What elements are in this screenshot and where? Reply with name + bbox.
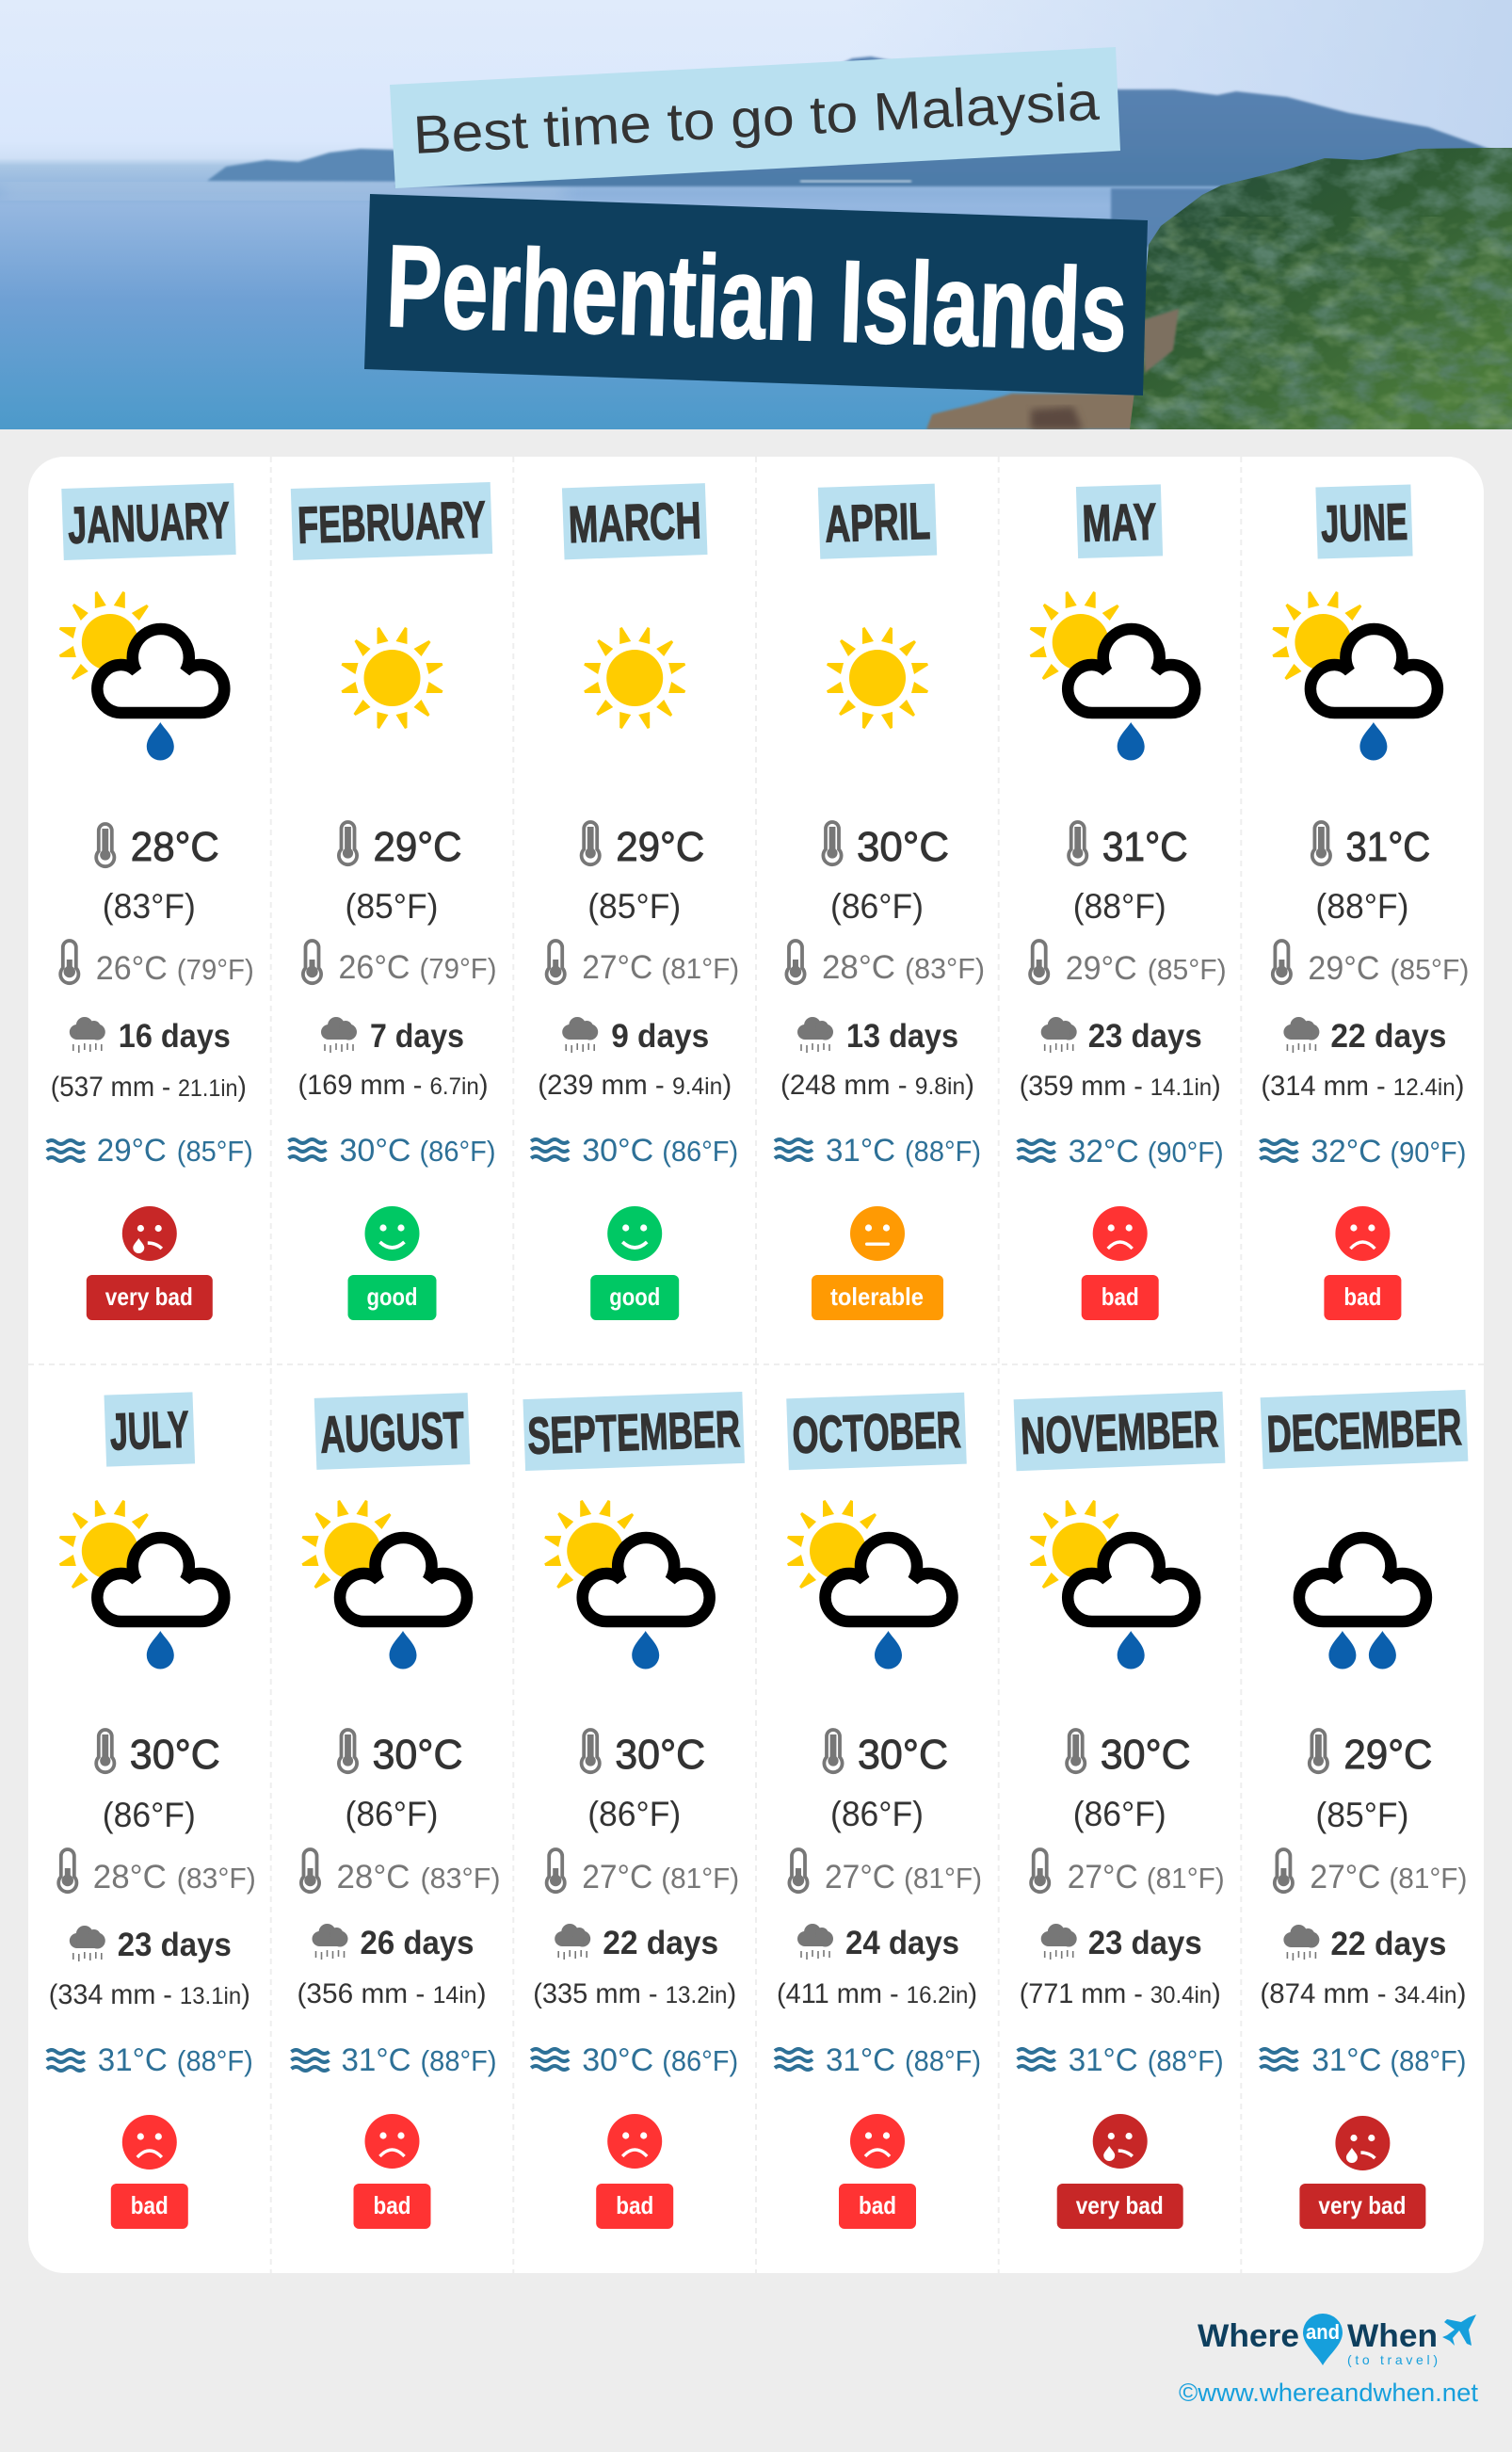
rating badge: bad: bad [373, 2191, 410, 2219]
high temperature fahrenheit: (86°F) [103, 1796, 196, 1834]
month label [1315, 485, 1413, 558]
sea temperature: 30°C [582, 1133, 653, 1169]
icon: waves [775, 2049, 812, 2070]
icon: rain cloud [1283, 1017, 1319, 1053]
low temperature: 27°C [582, 949, 652, 986]
panel: March [531, 483, 739, 1320]
icon: sun, cloud and rain [301, 1500, 467, 1669]
logo: Where and When: (to travel) [1347, 2352, 1438, 2367]
high temperature fahrenheit: (85°F) [1315, 1796, 1408, 1834]
sea temperature: (85°F) [177, 1135, 253, 1168]
rating badge: bad: bad [616, 2191, 653, 2219]
rating badge: good [348, 1275, 437, 1320]
sea temperature: 31°C [1311, 2042, 1381, 2078]
low temperature [1310, 1859, 1467, 1895]
rainfall: (248 mm - 9.8in) [780, 1070, 974, 1101]
rating badge: bad: bad [1102, 1282, 1139, 1311]
title ribbon [364, 194, 1148, 395]
rainfall: (239 mm - 9.4in) [538, 1070, 732, 1101]
logo: Where and When: and [1306, 2320, 1340, 2344]
icon: sun, cloud and rain [1030, 591, 1195, 761]
rainfall: (169 mm - 6.7in) [298, 1070, 489, 1101]
month label [562, 483, 707, 559]
low temperature: (83°F) [420, 1862, 501, 1895]
month label [818, 484, 937, 559]
panel: April [775, 484, 985, 1320]
low temperature: (79°F) [420, 952, 497, 985]
icon: waves [1018, 2049, 1055, 2070]
icon: thermometer high [1069, 822, 1086, 864]
logo: Where and When: Where [1198, 2318, 1299, 2354]
high temperature fahrenheit: (83°F) [103, 887, 196, 926]
subtitle ribbon: Best time to go to Malaysia [411, 72, 1101, 166]
month label [786, 1393, 967, 1470]
logo: Where and When: When [1347, 2318, 1438, 2354]
month label [61, 483, 236, 560]
month label: OCTOBER [792, 1400, 962, 1464]
sea temperature: 31°C [1069, 2042, 1138, 2078]
low temperature: (81°F) [661, 952, 739, 985]
month label: AUGUST [319, 1400, 465, 1464]
high temperature celsius: 31°C [1345, 824, 1430, 870]
icon: thermometer high [1067, 1730, 1085, 1772]
sea temperature: (88°F) [905, 1135, 981, 1168]
month label [1076, 484, 1163, 558]
panel: January [47, 483, 254, 1320]
high temperature fahrenheit: (85°F) [587, 887, 681, 926]
high temperature celsius: 29°C [616, 824, 704, 870]
icon: thermometer high [339, 1730, 357, 1772]
rating badge: very bad: very bad [1076, 2191, 1164, 2219]
icon: thermometer low [789, 1849, 808, 1892]
rainfall: (335 mm - 13.2in) [533, 1978, 736, 2009]
low temperature [1066, 950, 1227, 987]
rating badge: bad: bad [1343, 1282, 1381, 1311]
month label [1014, 1392, 1225, 1471]
high temperature fahrenheit: (88°F) [1073, 887, 1166, 926]
month label: APRIL [824, 492, 931, 554]
logo: Where and When [1198, 2314, 1476, 2367]
icon: thermometer low [547, 1849, 565, 1892]
rainy days: 22 days [1330, 1926, 1446, 1962]
icon: sun [584, 627, 685, 729]
sea temperature: (88°F) [177, 2044, 253, 2077]
icon: smiling face [365, 1206, 420, 1261]
high temperature fahrenheit: (86°F) [587, 1795, 681, 1833]
low temperature: 27°C [582, 1859, 652, 1895]
sea temperature [826, 1133, 981, 1169]
month label: JUNE [1320, 492, 1408, 553]
low temperature: (81°F) [1147, 1862, 1225, 1895]
sea temperature: 31°C [341, 2042, 410, 2078]
icon: rain cloud [70, 1017, 105, 1053]
header photo: sea and islands [0, 0, 1512, 429]
month label: SEPTEMBER [526, 1399, 741, 1465]
icon: sun, cloud and rain [1030, 1500, 1195, 1669]
low temperature [337, 1859, 501, 1895]
panel: June [1260, 485, 1469, 1320]
high temperature celsius: 30°C [1101, 1732, 1191, 1778]
icon: waves [775, 1139, 812, 1160]
low temperature: 27°C [1068, 1859, 1138, 1895]
icon: thermometer high [96, 1730, 114, 1772]
rainfall: (356 mm - 14in) [298, 1978, 486, 2009]
low temperature: 28°C [93, 1859, 167, 1895]
icon: waves [1260, 1140, 1297, 1161]
low temperature: (81°F) [1389, 1862, 1467, 1895]
rainfall: (411 mm - 16.2in) [777, 1978, 977, 2009]
icon: thermometer low [547, 941, 565, 983]
rating badge: very bad [87, 1275, 213, 1320]
rating badge: very bad [1057, 2184, 1183, 2229]
rating badge: very bad: very bad [105, 1282, 193, 1311]
icon: thermometer high [339, 822, 357, 864]
high temperature celsius: 30°C [858, 1732, 948, 1778]
low temperature: (83°F) [177, 1862, 256, 1895]
sea temperature: (88°F) [1390, 2044, 1466, 2077]
icon: waves [292, 2050, 330, 2071]
icon: thermometer low [1275, 1849, 1293, 1892]
high temperature fahrenheit: (86°F) [345, 1795, 439, 1833]
panel: August [292, 1393, 501, 2229]
month label: MAY [1082, 492, 1157, 553]
panel: November [1014, 1392, 1225, 2229]
month label [523, 1392, 745, 1471]
sea temperature: 32°C [1311, 1134, 1381, 1170]
sea temperature: 31°C [98, 2042, 168, 2078]
month label [105, 1392, 195, 1467]
low temperature: (85°F) [1148, 953, 1227, 986]
icon: crying face [1335, 2116, 1390, 2170]
rainy days: 22 days [1330, 1018, 1446, 1055]
icon: rain cloud [555, 1924, 590, 1960]
icon: sad face [122, 2115, 177, 2170]
sea temperature: (88°F) [1148, 2044, 1224, 2077]
low temperature: (81°F) [904, 1862, 982, 1895]
rainy days: 26 days [360, 1925, 475, 1961]
low temperature [825, 1859, 982, 1895]
rainfall: (771 mm - 30.4in) [1020, 1978, 1221, 2009]
low temperature: (83°F) [905, 952, 985, 985]
icon: sad face [850, 2114, 905, 2169]
icon: sun [341, 627, 442, 729]
sea temperature [341, 2042, 497, 2078]
sea temperature [582, 2042, 738, 2078]
rating badge: bad [839, 2184, 916, 2229]
sea temperature: 31°C [826, 1133, 895, 1169]
panel: September [523, 1392, 745, 2229]
month label: MARCH [568, 491, 702, 554]
icon: thermometer low [58, 1849, 76, 1892]
icon: sun [827, 627, 928, 729]
sea temperature [1069, 1134, 1224, 1170]
copyright url: ©www.whereandwhen.net [1179, 2379, 1478, 2407]
icon: waves [47, 1140, 85, 1161]
icon: waves [288, 1139, 326, 1160]
icon: rain cloud [1041, 1924, 1077, 1960]
sea temperature: (88°F) [420, 2044, 497, 2077]
sea temperature: (86°F) [420, 1135, 495, 1168]
sea temperature: (90°F) [1148, 1136, 1224, 1169]
rainy days: 24 days [845, 1925, 959, 1961]
high temperature fahrenheit: (85°F) [345, 887, 439, 926]
icon: thermometer low [60, 941, 78, 983]
panel: February [288, 482, 497, 1320]
icon: thermometer high [824, 1730, 843, 1772]
sea temperature: 31°C [826, 2042, 895, 2078]
icon: crying face [1093, 2114, 1148, 2169]
low temperature [96, 950, 254, 987]
rating badge: good: good [367, 1282, 418, 1311]
icon: rain cloud [797, 1017, 833, 1053]
rating badge: bad [596, 2184, 673, 2229]
icon: rain cloud [1041, 1017, 1077, 1053]
icon: rain cloud [562, 1017, 598, 1053]
icon: sad face [1335, 1206, 1390, 1261]
sea temperature [1311, 1134, 1466, 1170]
low temperature: 28°C [337, 1859, 410, 1895]
icon: waves [47, 2050, 85, 2071]
high temperature celsius: 30°C [373, 1732, 463, 1778]
low temperature: 27°C [1310, 1859, 1380, 1895]
icon: thermometer low [1031, 1849, 1049, 1892]
high temperature fahrenheit: (86°F) [830, 887, 924, 926]
low temperature [1068, 1859, 1225, 1895]
rating badge: bad: bad [859, 2191, 896, 2219]
icon: neutral face [850, 1206, 905, 1261]
low temperature: 28°C [822, 949, 895, 986]
rainy days: 22 days [603, 1925, 718, 1961]
rating badge: bad [354, 2184, 431, 2229]
high temperature celsius: 31°C [1102, 824, 1188, 870]
month label [314, 1393, 470, 1470]
icon: smiling face [607, 1206, 662, 1261]
high temperature fahrenheit: (86°F) [830, 1795, 924, 1833]
icon: thermometer low [301, 1849, 319, 1892]
panel: July [47, 1392, 256, 2229]
icon: sad face [607, 2114, 662, 2169]
icon: waves [1260, 2049, 1297, 2070]
panel: May [1018, 484, 1227, 1320]
panel: December [1260, 1390, 1468, 2229]
rating badge: tolerable: tolerable [830, 1282, 924, 1311]
icon: sun, cloud and rain [59, 591, 224, 761]
sea temperature [98, 2042, 253, 2078]
subtitle ribbon [390, 47, 1120, 188]
high temperature fahrenheit: (88°F) [1315, 887, 1408, 926]
month label: FEBRUARY [297, 490, 487, 555]
high temperature celsius: 30°C [615, 1732, 705, 1778]
rainfall: (537 mm - 21.1in) [51, 1072, 247, 1103]
icon: rain cloud [321, 1017, 357, 1053]
low temperature [1308, 950, 1469, 987]
high temperature celsius: 29°C [1343, 1732, 1432, 1778]
icon: thermometer high [96, 824, 114, 866]
icon: thermometer low [303, 941, 321, 983]
icon: waves [531, 2049, 569, 2070]
sea temperature: (90°F) [1390, 1136, 1466, 1169]
icon: rain cloud with two drops [1299, 1538, 1426, 1669]
icon: waves [1018, 1140, 1055, 1161]
rating badge: bad [1324, 1275, 1401, 1320]
sea temperature [339, 1133, 495, 1169]
icon: thermometer high [582, 1730, 600, 1772]
low temperature [822, 949, 985, 986]
low temperature: 29°C [1066, 950, 1137, 987]
rainfall: (314 mm - 12.4in) [1261, 1071, 1464, 1102]
icon: thermometer high [823, 822, 842, 864]
low temperature [93, 1859, 256, 1895]
sea temperature: 30°C [339, 1133, 410, 1169]
month label: NOVEMBER [1020, 1399, 1219, 1465]
rainy days: 16 days [119, 1018, 231, 1055]
rainy days: 23 days [118, 1927, 232, 1963]
low temperature [339, 949, 497, 986]
rating badge: good: good [609, 1282, 660, 1311]
rating badge: very bad [1299, 2184, 1425, 2229]
sea temperature [1311, 2042, 1466, 2078]
rainy days: 13 days [846, 1018, 958, 1055]
rainfall: (334 mm - 13.1in) [49, 1979, 250, 2010]
rainy days: 9 days [611, 1018, 709, 1055]
icon: sad face [365, 2114, 420, 2169]
icon: waves [531, 1139, 569, 1160]
month label: JANUARY [67, 491, 231, 555]
rainfall: (874 mm - 34.4in) [1260, 1978, 1466, 2009]
month label [291, 482, 492, 560]
low temperature [582, 949, 739, 986]
icon: sun, cloud and rain [544, 1500, 710, 1669]
rating badge: bad: bad [131, 2191, 169, 2219]
icon: thermometer low [786, 941, 805, 983]
rainfall: (359 mm - 14.1in) [1020, 1071, 1221, 1102]
icon: rain cloud [1283, 1925, 1319, 1960]
low temperature: (85°F) [1390, 953, 1469, 986]
panel: October [775, 1393, 982, 2229]
low temperature: 26°C [339, 949, 410, 986]
icon: rain cloud [797, 1924, 833, 1960]
rainy days: 23 days [1088, 1925, 1202, 1961]
sea temperature: 32°C [1069, 1134, 1139, 1170]
sea temperature: 30°C [582, 2042, 653, 2078]
title ribbon: Perhentian Islands [384, 221, 1129, 377]
low temperature: 27°C [825, 1859, 895, 1895]
month label: JULY [109, 1400, 190, 1460]
icon: rain cloud [313, 1924, 348, 1960]
icon: sun, cloud and rain [787, 1500, 953, 1669]
rating badge: bad [1082, 1275, 1159, 1320]
low temperature: (79°F) [177, 953, 254, 986]
sea temperature: (86°F) [662, 1135, 738, 1168]
rating badge: tolerable [812, 1275, 943, 1320]
sea temperature: 29°C [97, 1133, 167, 1169]
sea temperature: (88°F) [905, 2044, 981, 2077]
low temperature: 26°C [96, 950, 168, 987]
high temperature fahrenheit: (86°F) [1073, 1795, 1166, 1833]
rating badge: very bad: very bad [1318, 2191, 1406, 2219]
icon: thermometer high [1312, 822, 1330, 864]
rainy days: 23 days [1088, 1018, 1202, 1055]
high temperature celsius: 28°C [131, 824, 219, 870]
icon: thermometer low [1273, 941, 1291, 983]
low temperature: 29°C [1308, 950, 1379, 987]
sea temperature [826, 2042, 981, 2078]
icon: rain cloud [70, 1926, 105, 1961]
icon: sad face [1093, 1206, 1148, 1261]
icon: thermometer high [582, 822, 600, 864]
rating badge: good [590, 1275, 679, 1320]
icon: sun, cloud and rain [59, 1500, 224, 1669]
low temperature: (81°F) [661, 1862, 739, 1895]
sea temperature [1069, 2042, 1224, 2078]
rating badge: bad [111, 2184, 188, 2229]
icon: crying face [122, 1206, 177, 1261]
high temperature celsius: 30°C [857, 824, 949, 870]
icon: thermometer low [1030, 941, 1048, 983]
high temperature celsius: 29°C [373, 824, 461, 870]
icon: thermometer high [1310, 1730, 1327, 1772]
sea temperature [582, 1133, 738, 1169]
panel: calendar card [28, 457, 1484, 2273]
rainy days: 7 days [370, 1018, 464, 1055]
high temperature celsius: 30°C [130, 1732, 220, 1778]
low temperature [582, 1859, 739, 1895]
sea temperature [97, 1133, 253, 1169]
sea temperature: (86°F) [662, 2044, 738, 2077]
icon: sun, cloud and rain [1272, 591, 1438, 761]
